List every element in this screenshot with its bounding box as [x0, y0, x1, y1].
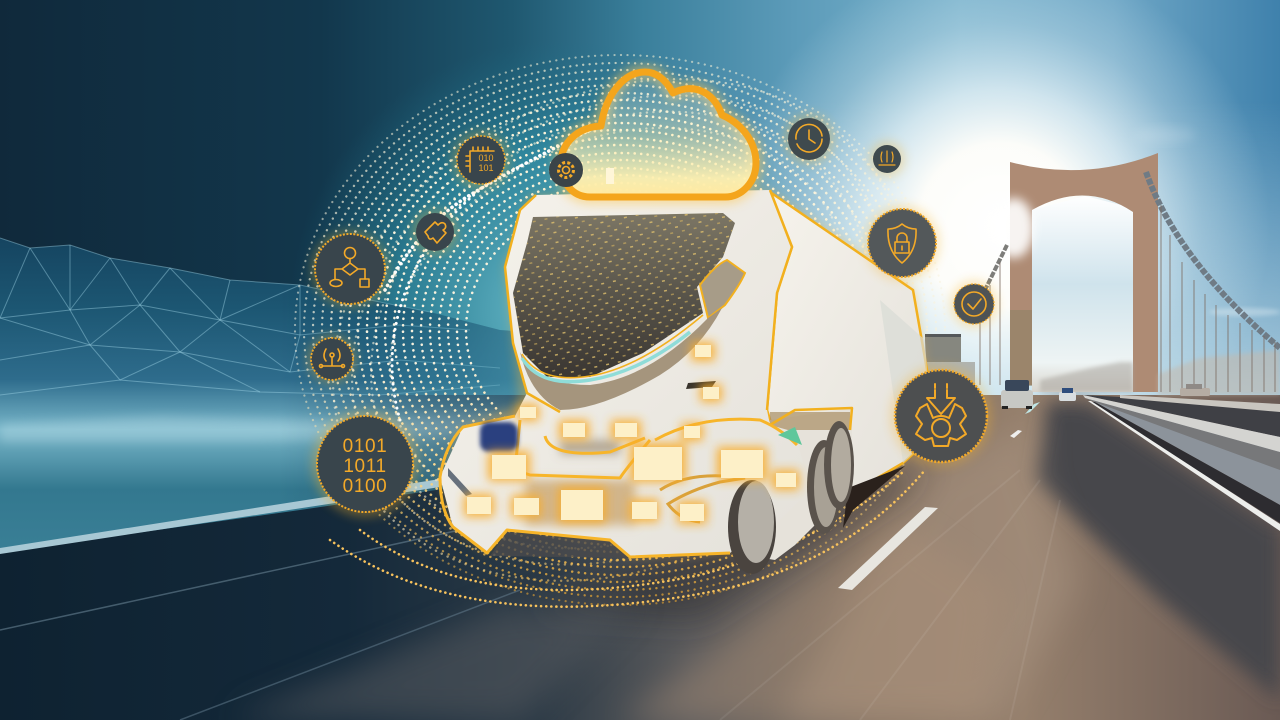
storage cube glows: [464, 342, 799, 524]
bridge tower: [1010, 153, 1158, 392]
icon: binary code: 0101: [343, 436, 387, 457]
storage cubes: [467, 345, 796, 521]
icon: clock: [784, 114, 834, 164]
bumper outline: [440, 416, 797, 557]
front left lamp: [448, 468, 472, 496]
icon: check mark: [950, 280, 998, 328]
cab outline: [505, 190, 852, 430]
windscreen reflective dots: [513, 213, 735, 377]
road lane markings: [838, 402, 1040, 590]
vehicles on bridge: [925, 334, 1210, 409]
icon: binary code: 1011: [343, 456, 387, 477]
icon: sensor waves: [869, 141, 905, 177]
bumper warm shading: [525, 440, 635, 525]
truck: [440, 190, 927, 574]
hanger cables: [980, 205, 1275, 392]
main cable: [1146, 172, 1280, 348]
hazy hills: [1040, 362, 1133, 392]
wireframe terrain landscape: [0, 238, 526, 548]
icon: antenna signal: [307, 334, 357, 384]
car: white pickup: [1001, 380, 1033, 409]
icon: flow chart: [311, 230, 389, 308]
trailer: [767, 192, 927, 492]
icon: small gear: [549, 153, 583, 187]
windscreen: [513, 213, 735, 377]
truck glow: [440, 190, 927, 557]
headlight recess: [480, 422, 518, 452]
dotted data sphere: [245, 0, 995, 678]
wheel arch light: [660, 476, 745, 522]
car: far lane: [1180, 384, 1210, 396]
icon: gear download: [890, 365, 992, 467]
mirror arm: [700, 260, 745, 318]
front wheel: [728, 480, 776, 574]
rear wheels: [807, 421, 854, 534]
icon: security shield: [864, 205, 940, 281]
icon: microchip: 010: [478, 153, 494, 163]
bridge tower opening: [1032, 196, 1133, 392]
suspension bridge: [980, 153, 1280, 395]
background sky: [188, 0, 1280, 395]
cloud: [561, 72, 756, 197]
distant truck: [925, 334, 975, 402]
lower windscreen trim: [520, 308, 722, 410]
icon: binary code: 0100: [343, 476, 387, 497]
lower grille: [490, 532, 630, 558]
green wheel detail: [778, 427, 802, 445]
icon: puzzle: [412, 209, 458, 255]
door handle: [686, 381, 716, 389]
wheel housing panel: [745, 408, 852, 560]
road surface: [0, 395, 1280, 720]
cab body: [440, 190, 805, 557]
roadside barrier strip: [0, 479, 440, 554]
car: small blue: [1059, 388, 1076, 401]
icon: binary code: [312, 411, 418, 517]
trailer underside dark strip: [843, 466, 905, 528]
icon: microchip: [452, 131, 510, 189]
icon: microchip: 101: [478, 163, 494, 173]
right guardrail and sidewalk: [1083, 395, 1280, 531]
